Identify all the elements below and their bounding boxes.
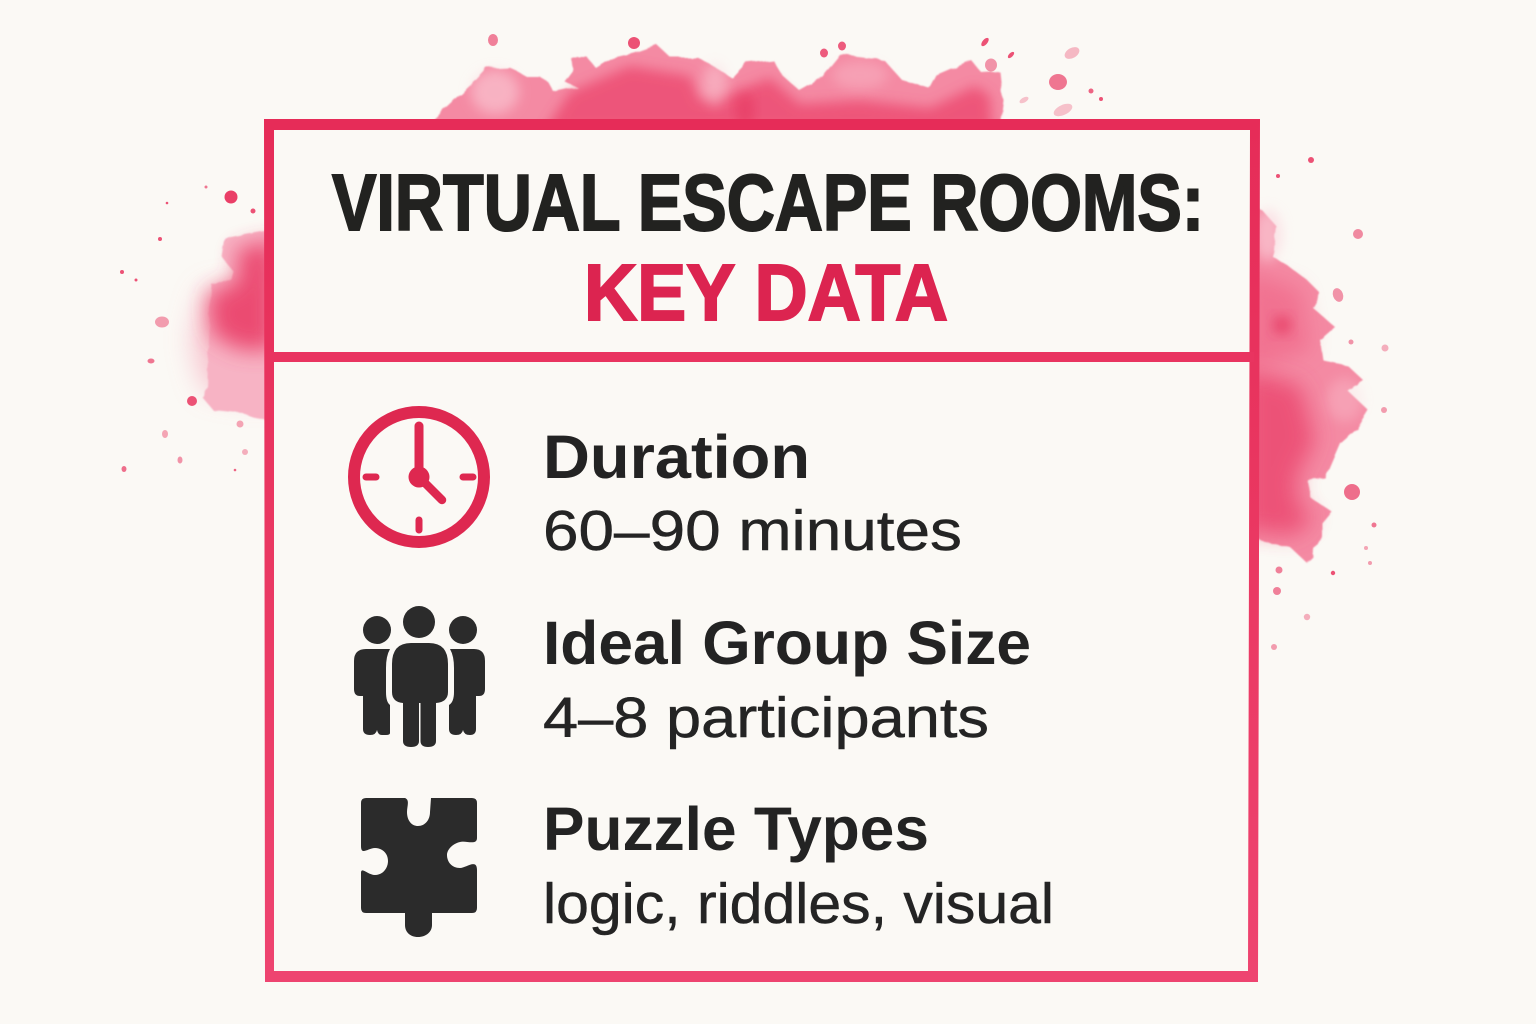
- icon: puzzle piece: [361, 798, 477, 937]
- text block: puzzle types: [543, 795, 1054, 936]
- watercolor splash: right: [1245, 205, 1368, 563]
- paint splatter dots: [120, 34, 1388, 650]
- text block: ideal group size: 4–8 participants: [543, 686, 989, 750]
- watercolor splash: left: [192, 230, 275, 422]
- text block: ideal group size: [543, 609, 1031, 750]
- text block: ideal group size: Ideal Group Size: [543, 609, 1031, 677]
- text block: duration: [543, 423, 962, 563]
- title: VIRTUAL ESCAPE ROOMS:: [332, 158, 1204, 247]
- icon: clock: [354, 412, 484, 542]
- title: [332, 158, 1204, 337]
- title: KEY DATA: [584, 248, 948, 337]
- text block: duration: Duration: [543, 423, 810, 491]
- text block: puzzle types: logic, riddles, visual: [543, 872, 1054, 936]
- icon: group of people: [354, 606, 485, 747]
- text block: puzzle types: Puzzle Types: [543, 795, 929, 863]
- panel: framed card: [264, 119, 1260, 982]
- text block: duration: 60–90 minutes: [543, 499, 962, 563]
- watercolor splash: top: [429, 45, 1003, 130]
